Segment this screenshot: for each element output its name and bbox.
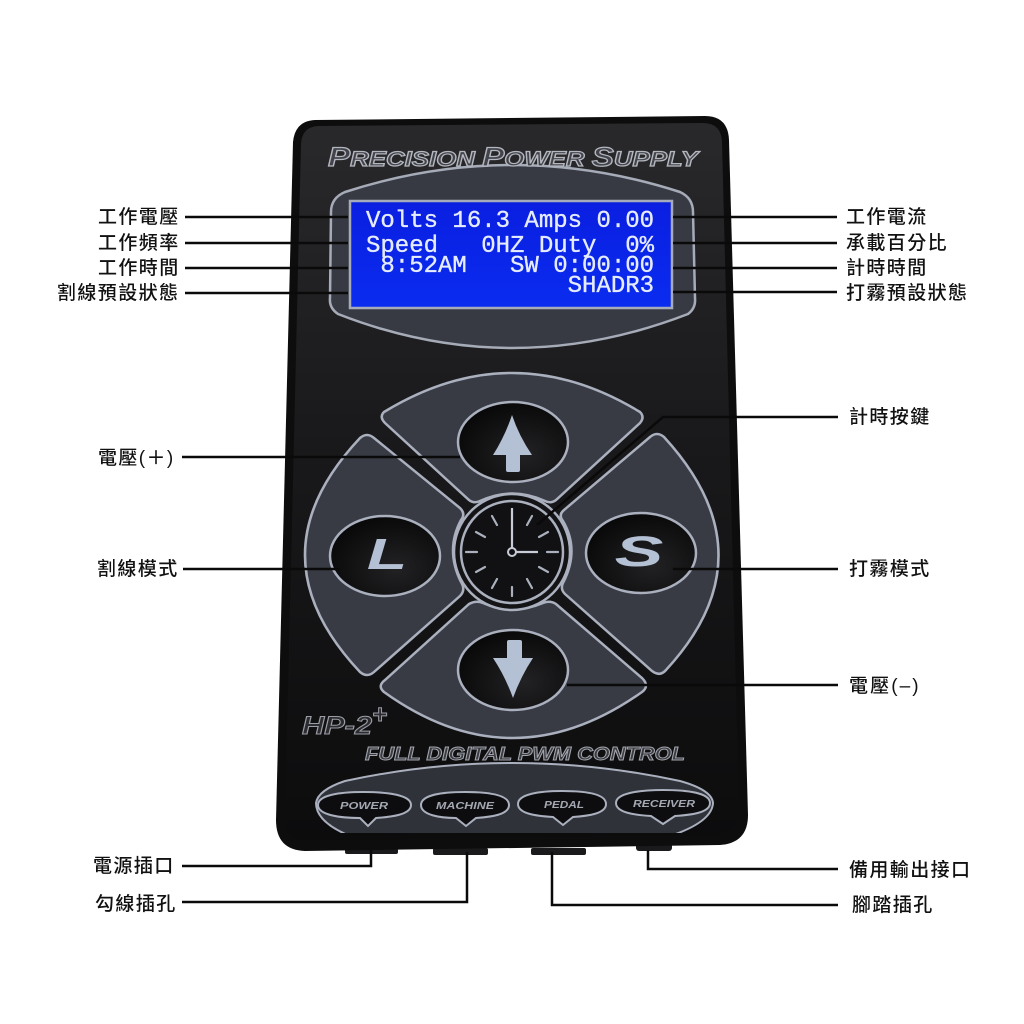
device body <box>276 116 748 855</box>
callout: liner mode: 割線模式 <box>97 558 179 580</box>
voltage down button <box>458 630 568 710</box>
callout: power socket: 電源插口 <box>93 855 175 877</box>
port label: pedal: PEDAL <box>544 800 584 811</box>
inner face <box>285 123 739 841</box>
screen bezel <box>330 165 695 348</box>
control pad <box>305 373 719 738</box>
outer case <box>276 116 748 851</box>
S button <box>586 513 696 593</box>
callout: working frequency: 工作頻率 <box>98 232 180 254</box>
port label: pedal <box>518 791 606 825</box>
bottom segment <box>381 602 646 738</box>
port label: power: POWER <box>340 801 389 812</box>
callout: shader mode: 打霧模式 <box>849 558 931 580</box>
callout: foot pedal socket: 腳踏插孔 <box>852 894 934 916</box>
callout: foot pedal socket <box>552 852 934 916</box>
LCD screen <box>350 201 672 308</box>
callout: duty percent: 承載百分比 <box>846 232 948 254</box>
callout: working current: 工作電流 <box>846 206 928 228</box>
callout: spare output port <box>648 850 971 881</box>
LCD readout line 4: SHADR3 <box>366 273 654 300</box>
port label panel <box>316 763 713 836</box>
model label: HP-2+: + <box>372 699 387 729</box>
L button <box>330 516 440 596</box>
callout: liner preset status: 割線預設狀態 <box>57 282 179 304</box>
LCD readout line 3: 8:52AM SW 0:00:00 <box>366 253 654 280</box>
callout: voltage plus: 電壓(＋) <box>98 448 175 469</box>
clock button <box>454 494 570 610</box>
connector ports <box>345 843 672 855</box>
right segment <box>561 434 719 674</box>
LCD readout line 1: Volts 16.3 Amps 0.00 <box>366 208 654 235</box>
voltage up button <box>458 402 568 482</box>
S button: S <box>615 527 663 575</box>
LCD readout line 2: Speed 0HZ Duty 0% <box>366 233 655 260</box>
model label: HP-2+ <box>302 699 387 740</box>
top segment <box>382 373 642 502</box>
callout: working time: 工作時間 <box>98 257 180 279</box>
callout: power socket <box>93 850 371 877</box>
port label: machine: MACHINE <box>436 801 494 812</box>
tagline: full digital PWM control: FULL DIGITAL PWM CONTROL <box>365 744 685 764</box>
L button: L <box>367 529 407 578</box>
callout: spare output port: 備用輸出接口 <box>849 859 971 881</box>
port label: receiver: RECEIVER <box>633 799 696 810</box>
model label: HP-2+: HP-2 <box>302 712 372 740</box>
callout: hook line socket: 勾線插孔 <box>95 893 177 915</box>
port label: receiver <box>616 790 710 824</box>
callout: hook line socket <box>95 852 467 915</box>
port label: power <box>318 792 411 826</box>
callout: timer button <box>537 406 931 525</box>
title: Precision Power Supply: PRECISION POWER SUPPLY <box>328 142 700 172</box>
callout: timer button: 計時按鍵 <box>849 406 931 428</box>
callout: shader preset status: 打霧預設狀態 <box>846 282 968 304</box>
port label: machine <box>421 792 509 826</box>
left segment <box>305 435 463 675</box>
callout: timer time: 計時時間 <box>846 257 928 279</box>
callout: voltage minus: 電壓(–) <box>849 676 920 697</box>
callout: working voltage: 工作電壓 <box>98 206 180 228</box>
